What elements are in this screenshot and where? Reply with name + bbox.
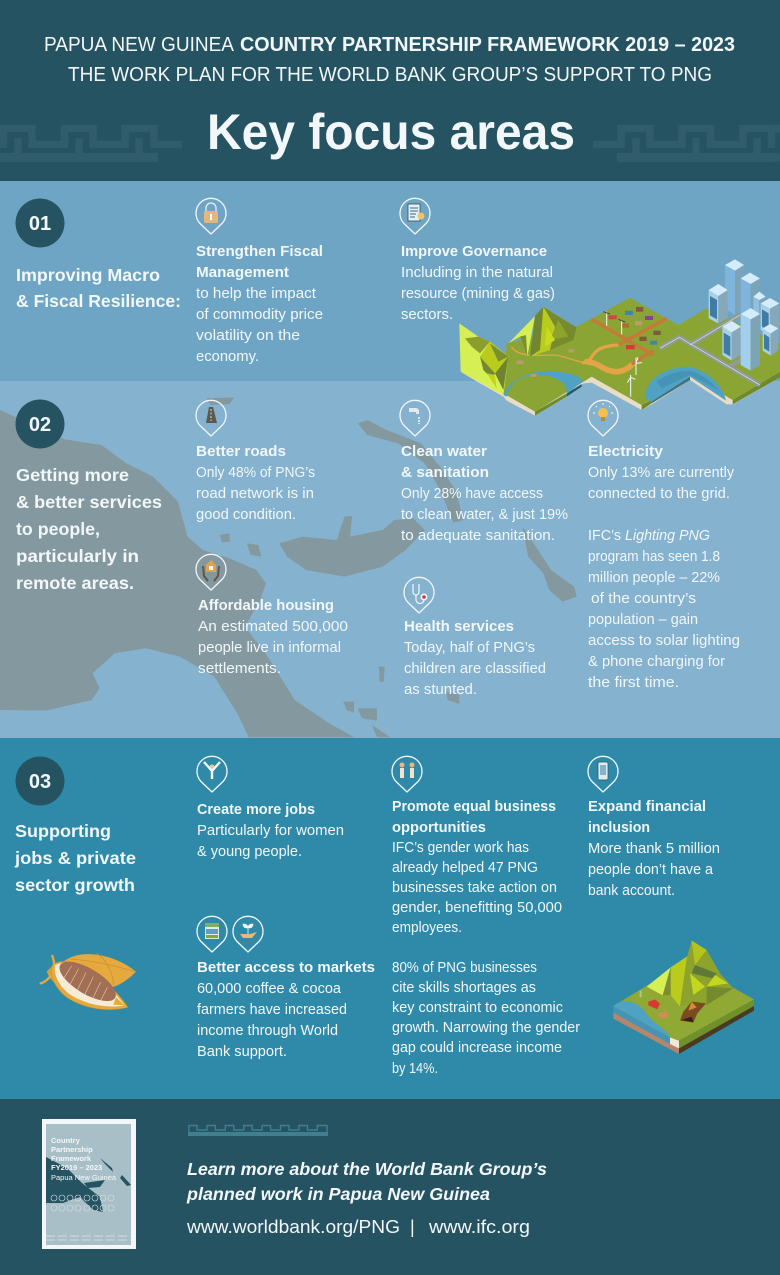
report cover thumbnail: Partnership (51, 1145, 93, 1154)
icon: document with seal (400, 198, 430, 234)
illustration: isometric mountain and coast (613, 941, 754, 1054)
text: affordable housing: settlements. (198, 661, 281, 677)
number badge 03 (16, 756, 64, 806)
text: promote equal business opportunities: 80% of PNG businesses (392, 960, 537, 976)
section heading 02: & better services (16, 492, 162, 512)
text: promote equal business opportunities: key constraint to economic (392, 1000, 563, 1016)
text: better roads: road network is in (196, 486, 314, 502)
pattern: left key border (0, 128, 182, 158)
text: promote equal business opportunities: businesses take action on (392, 880, 557, 896)
text: improve governance (401, 244, 555, 323)
city buildings (709, 259, 779, 371)
text: better access to markets: income through World (197, 1023, 338, 1039)
report cover thumbnail: Papua New Guinea (51, 1173, 117, 1182)
report cover thumbnail (42, 1119, 136, 1249)
map: Papua New Guinea (0, 397, 577, 737)
text: better roads: Better roads (196, 444, 286, 460)
text: electricity: of the country’s (591, 591, 696, 607)
panel: 02 services (0, 381, 780, 738)
text: affordable housing: people live in informal (198, 640, 341, 656)
village houses (517, 307, 661, 377)
text: web links (186, 1217, 530, 1237)
text: better access to markets: Bank support. (197, 1044, 287, 1060)
section heading 03: jobs & private (14, 848, 136, 868)
text: health services: Today, half of PNG’s (404, 640, 535, 656)
text: promote equal business opportunities: growth. Narrowing the gender (392, 1020, 580, 1036)
text: expand financial inclusion: Expand financial (588, 799, 706, 815)
illustration: isometric landscape with village and city (459, 259, 780, 416)
icon: two people (392, 756, 422, 792)
icon: light bulb (588, 400, 618, 436)
text: electricity: IFC’s Lighting PNG (588, 528, 710, 544)
text: clean water and sanitation: to clean water, & just 19% (401, 507, 568, 523)
panel: 03 jobs and private sector (0, 738, 780, 1099)
icon: road (196, 400, 226, 436)
section heading 02: Getting more (16, 465, 129, 485)
panel: footer (0, 1099, 780, 1275)
text: strengthen fiscal management: economy. (196, 349, 259, 365)
icon: stethoscope with heart (404, 577, 434, 613)
text: strengthen fiscal management: Strengthen Fiscal (196, 244, 323, 260)
text: promote equal business opportunities: cite skills shortages as (392, 980, 536, 996)
text: promote equal business opportunities: opportunities (392, 820, 486, 836)
text: promote equal business opportunities: already helped 47 PNG (392, 860, 538, 876)
icon: padlock with dollar (196, 198, 226, 234)
text: learn more (186, 1159, 547, 1204)
left mountain (459, 323, 508, 395)
text: electricity: the first time. (588, 675, 679, 691)
text: electricity: population – gain (588, 612, 698, 628)
text: affordable housing: An estimated 500,000 (198, 619, 348, 635)
section heading 03 (14, 821, 136, 895)
text: electricity: program has seen 1.8 (588, 549, 720, 565)
icon: mobile phone (588, 756, 618, 792)
text: promote equal business opportunities: Promote equal business (392, 799, 556, 815)
text: electricity: million people – 22% (588, 570, 720, 586)
section heading 02: particularly in (16, 546, 139, 566)
section heading 01: & Fiscal Resilience: (16, 291, 181, 311)
text: expand financial inclusion (588, 799, 720, 899)
number badge 02: 02 (29, 414, 51, 436)
text: better access to markets: Better access to markets (197, 960, 375, 976)
text: affordable housing: Affordable housing (198, 598, 334, 614)
text: web links: www.ifc.org (428, 1217, 530, 1237)
text: promote equal business opportunities: gender, benefitting 50,000 (392, 900, 562, 916)
text: better roads: Only 48% of PNG’s (196, 465, 315, 481)
panel: header (0, 0, 780, 181)
text: web links: | (410, 1217, 415, 1237)
text: expand financial inclusion: inclusion (588, 820, 650, 836)
text: improve governance: sectors. (401, 307, 453, 323)
text: expand financial inclusion: people don’t have a (588, 862, 714, 878)
text: web links: www.worldbank.org/PNG (186, 1217, 400, 1237)
heading: framework title (44, 34, 735, 86)
text: better roads (196, 444, 315, 523)
pattern: right key border (593, 128, 780, 158)
number badge 01 (16, 198, 64, 248)
text: clean water and sanitation: Clean water (401, 444, 487, 460)
text: improve governance: Improve Governance (401, 244, 547, 260)
text: promote equal business opportunities: by 14%. (392, 1061, 438, 1077)
text: expand financial inclusion: More thank 5 million (588, 841, 720, 857)
text: better roads: good condition. (196, 507, 296, 523)
heading: framework title: COUNTRY PARTNERSHIP FRAMEWORK 2019 – 2023 (240, 34, 735, 56)
text: create more jobs: Particularly for women (197, 823, 344, 839)
text: better access to markets (197, 960, 375, 1060)
text: clean water and sanitation: to adequate sanitation. (401, 528, 555, 544)
section heading 02 (16, 465, 162, 593)
illustration: cocoa pod (41, 953, 136, 1010)
text: improve governance: Including in the natural (401, 265, 553, 281)
river (512, 345, 633, 372)
text: create more jobs: Create more jobs (197, 802, 315, 818)
text: learn more: planned work in Papua New Guinea (186, 1184, 490, 1204)
text: promote equal business opportunities: gap could increase income (392, 1040, 562, 1056)
section heading 03: Supporting (15, 821, 111, 841)
text: create more jobs (197, 802, 344, 860)
number badge 01: 01 (29, 213, 51, 235)
icon: raised arms person (197, 756, 227, 792)
section heading 03: sector growth (15, 875, 135, 895)
report cover thumbnail: Country (51, 1136, 81, 1145)
icon: seedling in hand (233, 916, 263, 952)
text: electricity: access to solar lighting (588, 633, 740, 649)
number badge 03: 03 (29, 771, 51, 793)
icon: market stall (197, 916, 227, 952)
heading: framework title: PAPUA NEW GUINEA (44, 34, 235, 56)
report cover thumbnail: FY2019 – 2023 (51, 1163, 102, 1172)
report cover thumbnail: Framework (51, 1154, 92, 1163)
title: Key focus areas (207, 104, 575, 160)
panel: 01 macro and fiscal resilience (0, 181, 780, 381)
text: strengthen fiscal management: Management (196, 265, 289, 281)
section heading 01 (16, 265, 181, 311)
text: promote equal business opportunities: employees. (392, 920, 462, 936)
text: strengthen fiscal management (196, 244, 323, 365)
text: clean water and sanitation (401, 444, 568, 544)
text: health services: children are classified (404, 661, 546, 677)
icon: tap with water drop (400, 400, 430, 436)
section heading 02: remote areas. (16, 573, 134, 593)
section heading 02: to people, (16, 519, 100, 539)
text: health services: as stunted. (404, 682, 477, 698)
text: better access to markets: farmers have increased (197, 1002, 347, 1018)
number badge 02 (16, 400, 64, 448)
text: strengthen fiscal management: to help the impact (196, 286, 316, 302)
text: electricity: connected to the grid. (588, 486, 730, 502)
icon: house in hands (196, 554, 226, 590)
text: strengthen fiscal management: of commodity price (196, 307, 323, 323)
text: clean water and sanitation: Only 28% have access (401, 486, 543, 502)
power pylons and wind turbines (603, 312, 642, 397)
text: health services: Health services (404, 619, 514, 635)
text: expand financial inclusion: bank account. (588, 883, 675, 899)
text: electricity: Electricity (588, 444, 663, 460)
text: promote equal business opportunities: IFC’s gender work has (392, 840, 529, 856)
text: improve governance: resource (mining & gas) (401, 286, 555, 302)
text: health services (404, 619, 546, 698)
text: better access to markets: 60,000 coffee & cocoa (197, 981, 342, 997)
text: electricity (588, 444, 740, 691)
text: electricity: Only 13% are currently (588, 465, 735, 481)
middle mountain (508, 307, 577, 357)
text: create more jobs: & young people. (197, 844, 302, 860)
text: clean water and sanitation: & sanitation (401, 465, 489, 481)
pattern: footer key border (188, 1126, 328, 1136)
section heading 01: Improving Macro (16, 265, 160, 285)
heading: framework title: THE WORK PLAN FOR THE WORLD BANK GROUP’S SUPPORT TO PNG (68, 64, 712, 86)
text: electricity: & phone charging for (588, 654, 725, 670)
text: strengthen fiscal management: volatility on the (196, 328, 300, 344)
text: promote equal business opportunities (392, 799, 580, 1077)
text: learn more: Learn more about the World Bank Group’s (187, 1159, 547, 1179)
text: affordable housing (198, 598, 348, 677)
